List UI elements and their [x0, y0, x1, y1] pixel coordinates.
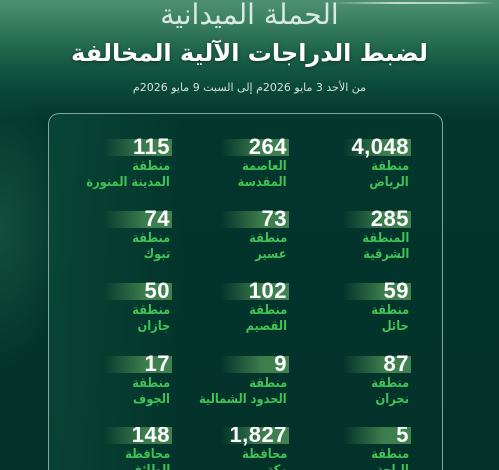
stat: Najran [348, 351, 411, 407]
stat: Asir: 73 [262, 206, 287, 231]
stat: Makkah governorate [226, 427, 289, 470]
stat: Northern Borders: الحدود الشمالية [199, 392, 287, 407]
stat: Taif governorate [109, 427, 172, 470]
stat: Qassim: 102 [249, 278, 287, 303]
top light streak [330, 2, 495, 4]
stat: Qassim: القصيم [246, 319, 287, 334]
stat: Makkah capital: العاصمة [242, 159, 287, 174]
stat: Riyadh: 4,048 [351, 134, 409, 159]
stat: Riyadh: الرياض [370, 175, 409, 190]
stat: Qassim [226, 278, 289, 334]
stat: Makkah governorate: محافظة [242, 447, 287, 462]
stat: Madinah: 115 [133, 134, 170, 159]
stat: Madinah: المدينة المنورة [87, 175, 170, 190]
stat: Madinah: منطقة [132, 159, 170, 174]
stat: Northern Borders: 9 [274, 351, 287, 376]
stat: Najran: 87 [384, 351, 409, 376]
stat: Al Jouf: 17 [145, 351, 170, 376]
stat: Tabuk: 74 [145, 206, 170, 231]
stat: Al Jouf: الجوف [133, 392, 170, 407]
stat: Northern Borders: منطقة [249, 376, 287, 391]
stat: Qassim: منطقة [249, 303, 287, 318]
stat: Asir [226, 206, 289, 262]
stat: Najran: منطقة [371, 376, 409, 391]
stat: Al Jouf [109, 351, 172, 407]
left glow [0, 90, 70, 370]
stat: Makkah capital: 264 [249, 134, 287, 159]
stat: Jazan: منطقة [132, 303, 170, 318]
stat: Hail: حائل [382, 319, 409, 334]
stat: Taif governorate: محافظة [125, 447, 170, 462]
stat: Eastern Province: 285 [371, 206, 409, 231]
stat: Makkah capital: المقدسة [238, 175, 287, 190]
date range: من الأحد 3 مايو 2026م إلى السبت 9 مايو 2026م [133, 81, 366, 94]
stat: Tabuk [110, 206, 172, 262]
stat: Tabuk: تبوك [143, 247, 170, 262]
stat: Eastern Province [348, 206, 411, 262]
stat: Eastern Province: المنطقة [362, 231, 409, 246]
heading: لضبط الدراجات الآلية المخالفة [71, 39, 428, 67]
stat: Hail: 59 [384, 278, 409, 303]
stat: Jazan: جازان [137, 319, 170, 334]
stat: Jazan: 50 [145, 278, 170, 303]
stat: Hail [348, 278, 411, 334]
stat: Jazan [110, 278, 172, 334]
stat: Makkah capital [226, 134, 289, 190]
stat: Al Bahah: منطقة [371, 447, 409, 462]
stat: Northern Borders [199, 351, 289, 407]
stat: Hail: منطقة [371, 303, 409, 318]
panel: statistics [48, 113, 443, 470]
stat: Riyadh: منطقة [371, 159, 409, 174]
stat: Asir: منطقة [249, 231, 287, 246]
stat: Al Jouf: منطقة [132, 376, 170, 391]
stat: Asir: عسير [256, 247, 287, 262]
stat: Tabuk: منطقة [132, 231, 170, 246]
stat: Eastern Province: الشرقية [363, 247, 409, 262]
stat: Al Bahah [348, 427, 411, 470]
stat: Najran: نجران [376, 392, 409, 407]
stat: Riyadh [348, 134, 411, 190]
stat: Madinah [86, 134, 172, 190]
